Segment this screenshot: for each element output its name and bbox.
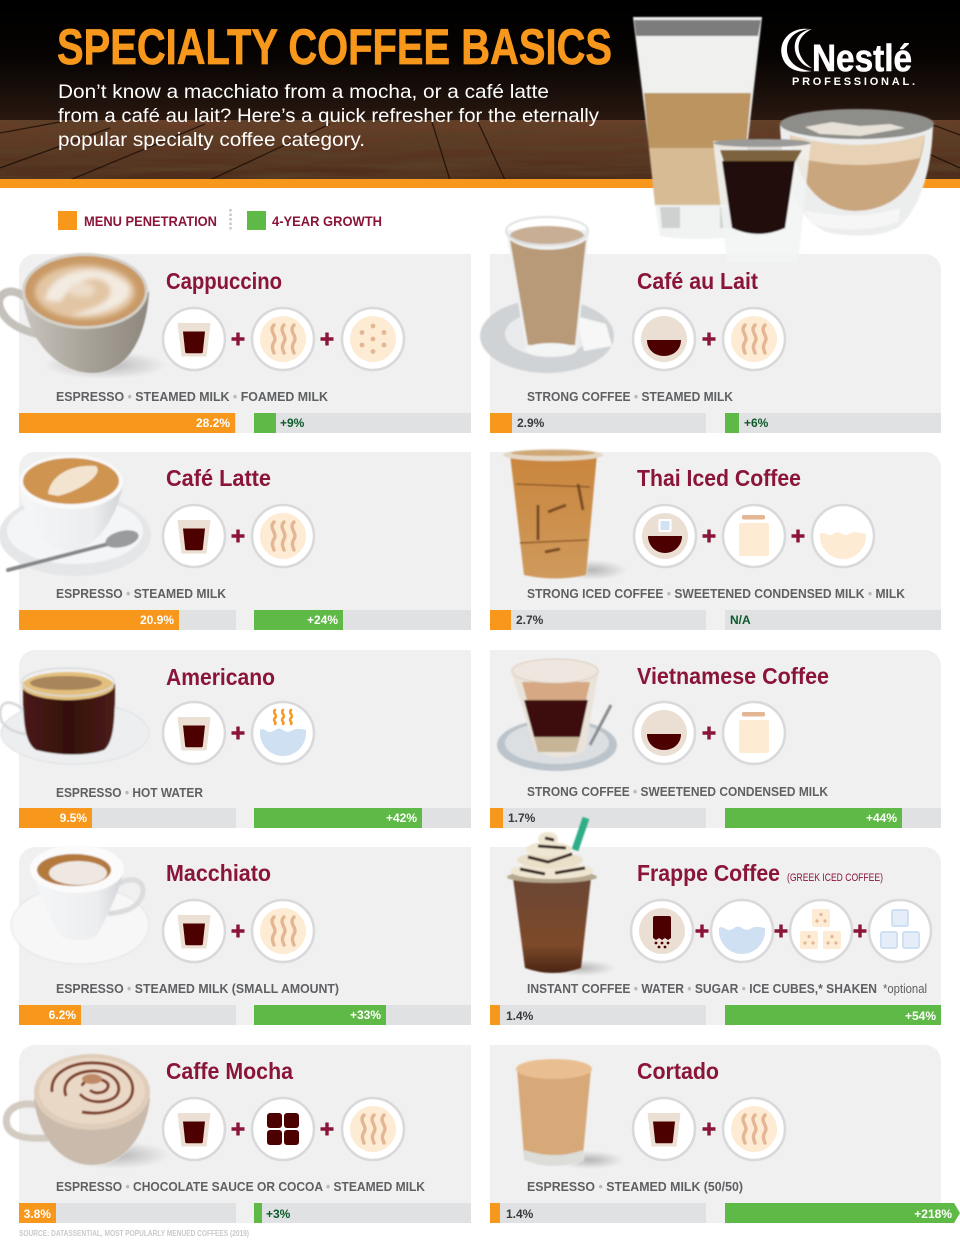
bar: menu penetration	[490, 610, 706, 630]
source note: SOURCE: DATASSENTIAL, MOST POPULARLY MENUED COFFEES (2019)	[19, 1228, 249, 1238]
bar: growth	[725, 808, 941, 828]
logo: Nestle Professional: PROFESSIONAL.	[792, 76, 915, 88]
photo: cortado glass	[516, 1059, 624, 1169]
title: Cortado	[637, 1058, 719, 1084]
title: Café au Lait	[637, 268, 758, 294]
title: Thai Iced Coffee	[637, 465, 801, 491]
arrow bar: growth	[725, 1203, 960, 1223]
icons: ingredients	[163, 308, 404, 370]
bar: growth	[254, 610, 471, 630]
bar: menu penetration	[19, 413, 236, 433]
bar: growth: +24%	[307, 613, 338, 627]
photo: cappuccino cup	[0, 253, 167, 379]
bar: menu penetration	[490, 1005, 706, 1025]
photo: cafe au lait glass	[480, 217, 614, 373]
bar: menu penetration	[490, 1203, 706, 1223]
icons: ingredients	[163, 1098, 404, 1160]
panel: Americano	[0, 650, 471, 828]
bar: menu penetration	[19, 1203, 236, 1223]
intro text: from a café au lait? Here’s a quick refresher for the eternally	[58, 105, 599, 127]
ingredient list: *optional	[883, 981, 927, 996]
legend	[58, 209, 382, 231]
photo: macchiato cup	[11, 845, 149, 964]
bar: menu penetration: 9.5%	[60, 811, 87, 825]
title: Vietnamese Coffee	[637, 663, 829, 689]
icons: ingredients	[634, 505, 874, 567]
bar: menu penetration: 3.8%	[24, 1207, 51, 1221]
title: SPECIALTY COFFEE BASICS	[57, 19, 612, 75]
bar: menu penetration: 1.4%	[506, 1207, 534, 1221]
title: Americano	[166, 664, 275, 690]
title: Cappuccino	[166, 268, 282, 294]
bar: growth	[254, 1203, 471, 1223]
legend: MENU PENETRATION	[84, 213, 217, 229]
ingredient list: STRONG COFFEE • SWEETENED CONDENSED MILK	[527, 784, 829, 799]
panel: Cappuccino	[0, 253, 471, 433]
intro text: Don’t know a macchiato from a mocha, or a café latte	[58, 81, 549, 103]
bar: menu penetration	[19, 1005, 236, 1025]
bar: menu penetration: 28.2%	[196, 416, 230, 430]
panel: Caffe Mocha	[6, 1045, 471, 1223]
bar: growth	[725, 1005, 941, 1025]
ingredient list: STRONG COFFEE • STEAMED MILK	[527, 389, 734, 404]
panel: Cafe Latte	[0, 452, 471, 630]
panel: Thai Iced Coffee	[490, 449, 941, 630]
title: Café Latte	[166, 465, 271, 491]
logo: Nestle Professional	[781, 29, 915, 88]
title: Caffe Mocha	[166, 1058, 293, 1084]
photo: latte cup with spoon	[0, 455, 151, 576]
bar: growth: +3%	[266, 1207, 291, 1221]
bar: growth	[254, 808, 471, 828]
photo: glass coffee bowl	[780, 109, 934, 236]
ingredient list: STRONG ICED COFFEE • SWEETENED CONDENSED MILK • MILK	[527, 586, 906, 601]
logo: Nestle Professional: Nestlé	[812, 38, 912, 80]
intro text: popular specialty coffee category.	[58, 129, 365, 151]
ingredient list: ESPRESSO • STEAMED MILK	[56, 586, 227, 601]
photo: vietnamese coffee glass	[497, 659, 617, 771]
bar: menu penetration: 2.9%	[517, 416, 545, 430]
photo: mocha cup	[6, 1054, 170, 1169]
bar: menu penetration	[490, 413, 706, 433]
title: (GREEK ICED COFFEE)	[787, 872, 883, 884]
icons: ingredients	[633, 1098, 785, 1160]
bar: growth: +6%	[744, 416, 769, 430]
bar: menu penetration: 2.7%	[516, 613, 544, 627]
arrow bar: growth: +218%	[914, 1207, 952, 1221]
title	[637, 860, 883, 886]
legend: 4-YEAR GROWTH	[272, 213, 382, 229]
bar: growth: N/A	[730, 613, 751, 627]
bar: growth	[725, 610, 941, 630]
bar: growth: +9%	[280, 416, 305, 430]
title: Macchiato	[166, 860, 271, 886]
icons: ingredients	[631, 900, 931, 962]
ingredient list: ESPRESSO • STEAMED MILK (SMALL AMOUNT)	[56, 981, 339, 996]
panel: Vietnamese Coffee	[490, 650, 941, 828]
panel: Frappe Coffee	[490, 818, 941, 1025]
bar: menu penetration	[19, 610, 236, 630]
ingredient list: ESPRESSO • CHOCOLATE SAUCE OR COCOA • STEAMED MILK	[56, 1179, 426, 1194]
icons: ingredients	[633, 308, 785, 370]
bar: menu penetration: 6.2%	[49, 1008, 76, 1022]
photo: americano glass cup	[0, 668, 149, 764]
icons: ingredients	[633, 702, 785, 764]
icons: ingredients	[163, 505, 314, 567]
ingredient list: INSTANT COFFEE • WATER • SUGAR • ICE CUBES,* SHAKEN	[527, 981, 877, 996]
photo: tall latte glass	[633, 17, 762, 239]
panel: Cafe au Lait	[480, 217, 941, 433]
bar: menu penetration	[19, 808, 236, 828]
bar: growth	[725, 413, 941, 433]
bar: menu penetration: 1.7%	[508, 811, 536, 825]
title: Frappe Coffee	[637, 860, 780, 886]
bar: growth	[254, 1005, 471, 1025]
bar: growth: +54%	[905, 1009, 936, 1023]
bar: growth	[254, 413, 471, 433]
header background	[0, 0, 960, 188]
ingredient list: ESPRESSO • STEAMED MILK • FOAMED MILK	[56, 389, 329, 404]
icons: ingredients	[163, 702, 314, 764]
bar: menu penetration: 1.4%	[506, 1009, 534, 1023]
ingredient list: ESPRESSO • STEAMED MILK (50/50)	[527, 1179, 743, 1194]
panel: Cortado	[490, 1045, 960, 1223]
intro text	[58, 81, 599, 151]
panel: Macchiato	[11, 845, 471, 1025]
bar: growth: +42%	[386, 811, 417, 825]
icons: ingredients	[163, 900, 314, 962]
photo: frappe cup	[507, 818, 616, 976]
bar: growth: +44%	[866, 811, 897, 825]
photo: espresso glass	[713, 139, 811, 262]
bar: menu penetration	[490, 808, 706, 828]
photo: thai iced coffee cup	[503, 449, 627, 580]
bar: growth: +33%	[350, 1008, 381, 1022]
ingredient list: ESPRESSO • HOT WATER	[56, 785, 204, 800]
bar: menu penetration: 20.9%	[140, 613, 174, 627]
